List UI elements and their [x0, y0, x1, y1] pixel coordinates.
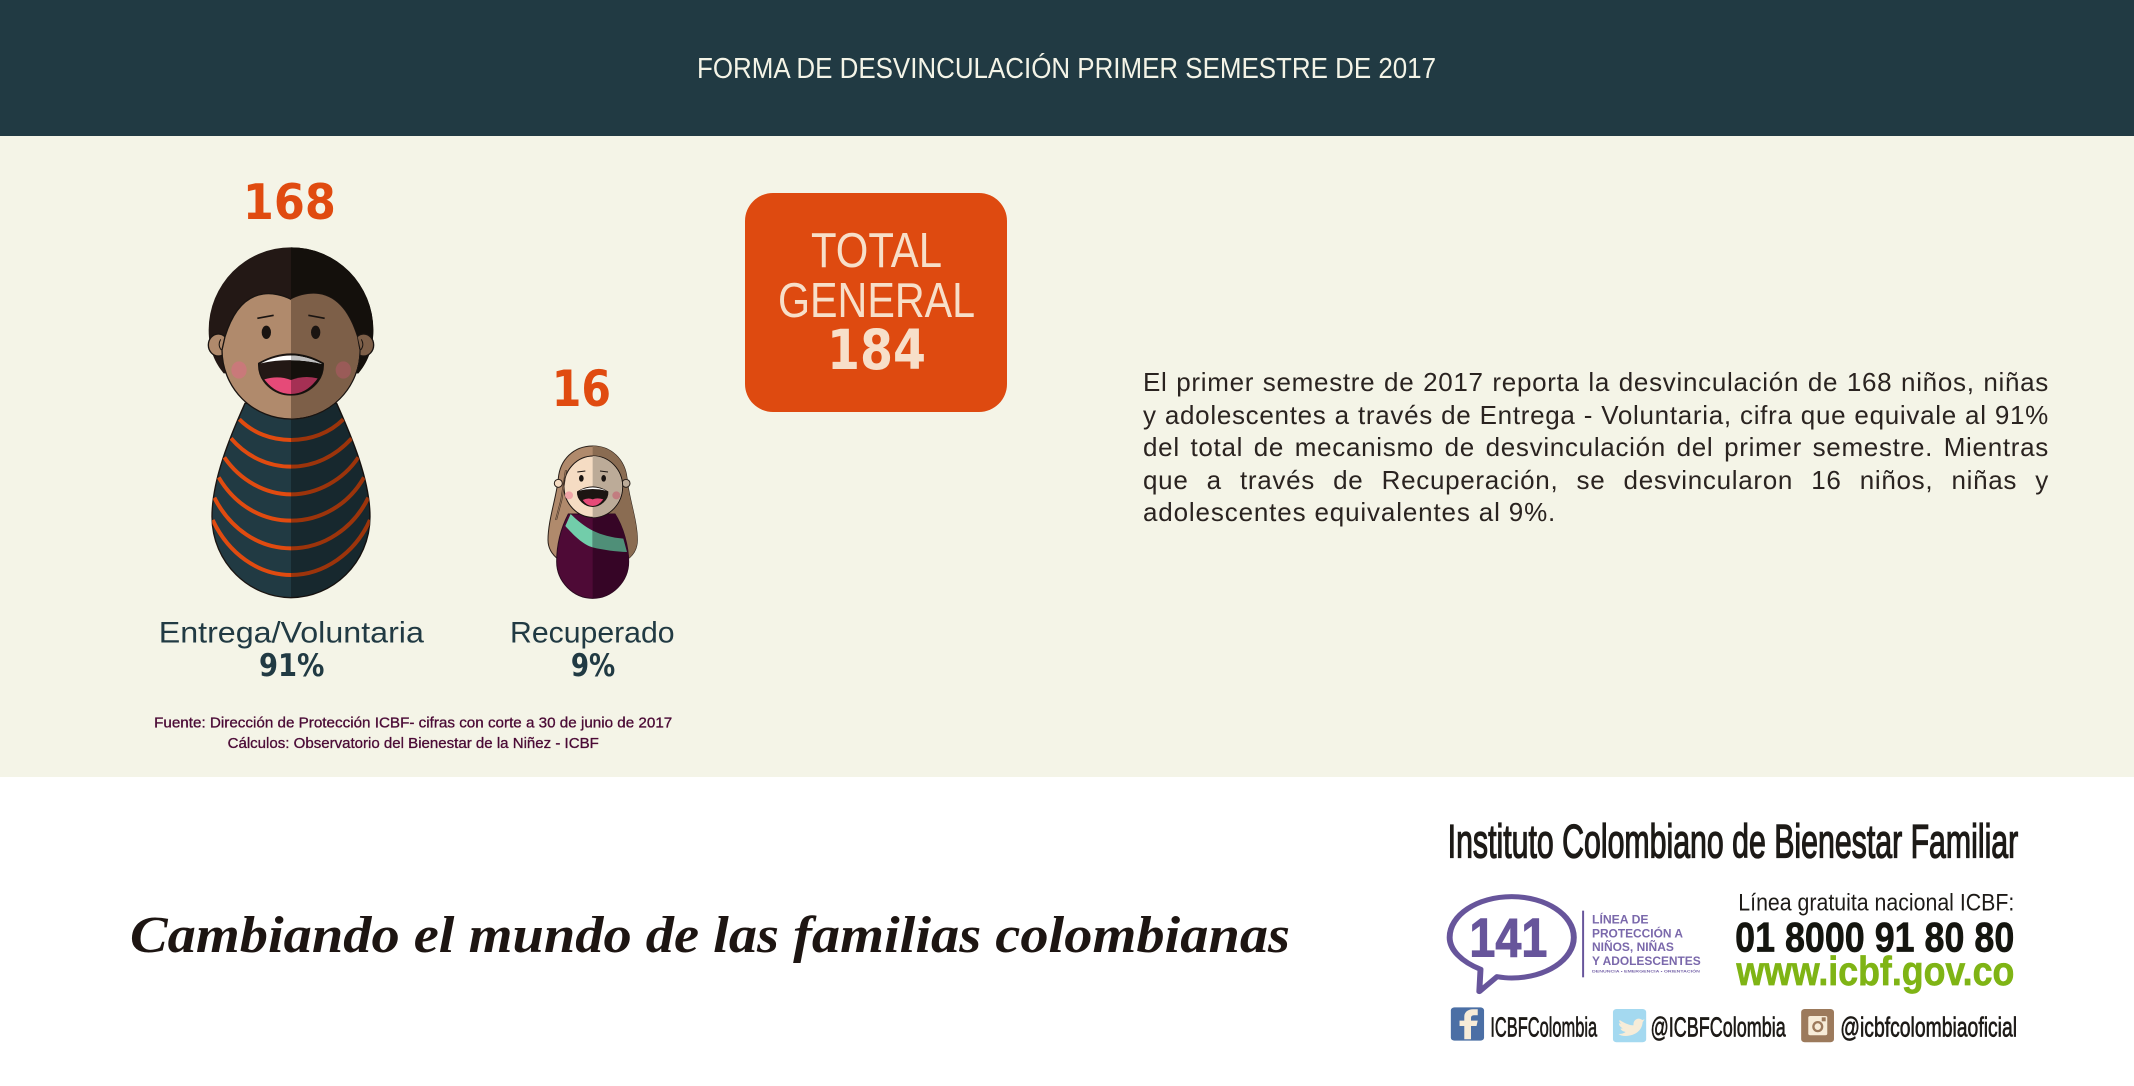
- boy body: [212, 400, 374, 600]
- handle: instagram: @icbfcolombiaoficial: [1840, 1013, 2017, 1043]
- icon: girl figure: [548, 446, 637, 598]
- logo: 141 line: 141: [1469, 907, 1547, 969]
- callout: total general: GENERAL: [778, 274, 975, 328]
- logo: 141 line: LÍNEA DE: [1592, 912, 1649, 926]
- label: Recuperado: Recuperado: [510, 616, 675, 649]
- body paragraph: del total de mecanismo de desvinculación del primer semestre. Mientras: [1143, 432, 2049, 462]
- number: 168: 168: [243, 174, 336, 231]
- icon: twitter: [1613, 1009, 1646, 1042]
- logo: 141 line: DENUNCIA • EMERGENCIA • ORIENTACIÓN: [1592, 969, 1700, 974]
- title: FORMA DE DESVINCULACIÓN PRIMER SEMESTRE DE 2017: [697, 52, 1436, 85]
- icon: facebook: [1451, 1007, 1484, 1041]
- logo: 141 line: NIÑOS, NIÑAS: [1592, 940, 1674, 954]
- contact line label: Línea gratuita nacional ICBF:: [1738, 889, 2014, 916]
- panel: main cream area: [0, 136, 2134, 777]
- logo: 141 line: [1450, 897, 1701, 992]
- body paragraph: adolescentes equivalentes al 9%.: [1143, 497, 1556, 527]
- panel: institutional block: [1448, 815, 2018, 1043]
- icon: boy figure: [208, 247, 374, 600]
- body paragraph: y adolescentes a través de Entrega - Voluntaria, cifra que equivale al 91%: [1143, 400, 2049, 430]
- icon: instagram: [1801, 1009, 1834, 1042]
- source note: [154, 715, 672, 752]
- callout: total general: [745, 193, 1007, 412]
- value: 91%: 91%: [259, 648, 324, 684]
- callout: total general: TOTAL: [811, 224, 942, 278]
- handle: twitter: @ICBFColombia: [1651, 1013, 1786, 1043]
- phone number: 01 8000 91 80 80: [1735, 914, 2014, 961]
- body paragraph: que a través de Recuperación, se desvincularon 16 niños, niñas y: [1143, 464, 2049, 494]
- handle: facebook: ICBFColombia: [1490, 1013, 1597, 1043]
- boy head: [208, 247, 374, 419]
- website: www.icbf.gov.co: [1736, 949, 2014, 994]
- tagline: Cambiando el mundo de las familias colombianas: [130, 907, 1290, 964]
- logo: 141 line: PROTECCIÓN A: [1592, 926, 1683, 940]
- logo: 141 line: Y ADOLESCENTES: [1592, 954, 1701, 968]
- value: 9%: 9%: [571, 648, 615, 684]
- header band: [0, 0, 2134, 136]
- source note: Fuente: Dirección de Protección ICBF- cifras con corte a 30 de junio de 2017: [154, 715, 672, 731]
- body paragraph: [1143, 367, 2049, 527]
- body paragraph: El primer semestre de 2017 reporta la desvinculación de 168 niños, niñas: [1143, 367, 2049, 397]
- source note: Cálculos: Observatorio del Bienestar de la Niñez - ICBF: [228, 736, 599, 752]
- number: 16: 16: [552, 359, 611, 418]
- callout: total general: 184: [827, 318, 926, 382]
- label: Entrega/Voluntaria: Entrega/Voluntaria: [159, 616, 425, 649]
